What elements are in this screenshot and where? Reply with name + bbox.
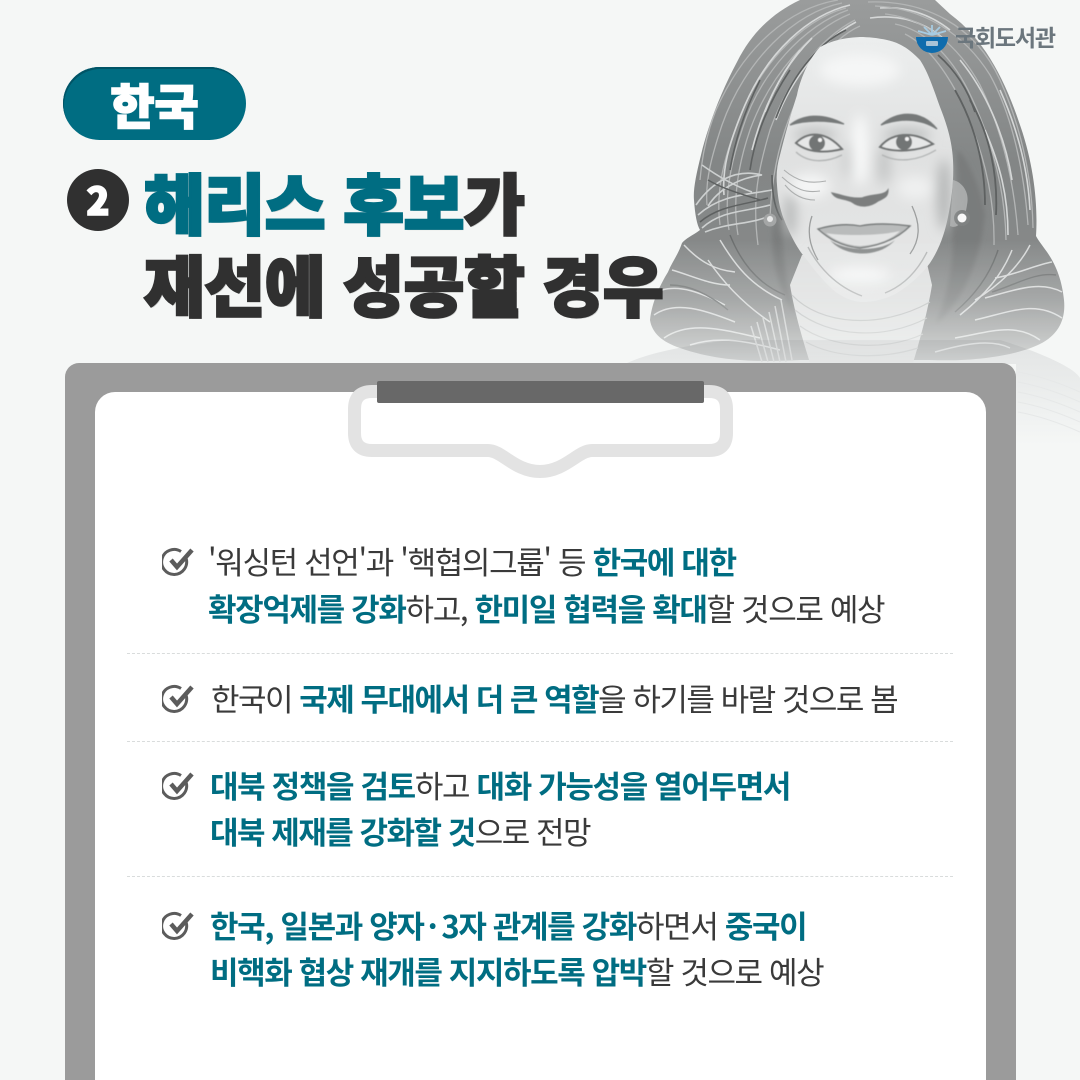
face shading [784, 54, 951, 284]
right strands [868, 2, 1033, 245]
left eye [796, 135, 842, 161]
item 3 [162, 762, 790, 853]
divider [127, 876, 953, 877]
logo emblem [916, 25, 948, 53]
pill label: 한국 [110, 68, 199, 138]
right eye [880, 134, 936, 160]
top and left strands [700, 0, 860, 245]
icon: check [162, 548, 194, 576]
clipboard clip [348, 381, 733, 478]
face [777, 37, 953, 302]
right eyebrow [881, 114, 937, 129]
text line 1: 대북 정책을 검토하고 대화 가능성을 열어두면서 [210, 762, 790, 807]
dark shadow beside face [773, 156, 984, 312]
neck [751, 255, 932, 363]
mouth [818, 224, 910, 254]
text: 한국이 국제 무대에서 더 큰 역할을 하기를 바랄 것으로 봄 [211, 675, 897, 720]
divider [127, 741, 953, 742]
logo: National Assembly Library [916, 19, 1056, 53]
icon: check [162, 912, 194, 940]
title line 1: 해리스 후보가 [144, 153, 524, 249]
cheek wrinkles [782, 170, 826, 200]
text line 2: 확장억제를 강화하고, 한미일 협력을 확대할 것으로 예상 [208, 585, 884, 630]
item 1 [162, 538, 884, 630]
item 4 [162, 902, 824, 993]
icon: check [162, 684, 194, 713]
icon: check [162, 772, 194, 800]
divider [127, 653, 953, 654]
text line 1: 한국, 일본과 양자·3자 관계를 강화하면서 중국이 [210, 902, 806, 947]
logo wordmark: 국회도서관 [955, 19, 1055, 53]
number badge [67, 169, 129, 231]
portrait illustration [628, 0, 1080, 432]
text line 2: 대북 제재를 강화할 것으로 전망 [210, 808, 590, 853]
shoulders [625, 340, 1080, 445]
lower curl strands [654, 240, 1062, 352]
ears and earrings [764, 180, 970, 227]
category pill: 한국 [63, 67, 246, 140]
title line 2: 재선에 성공할 경우 [144, 235, 663, 331]
hair mass [650, 0, 1064, 361]
item 2 [162, 675, 897, 720]
left eyebrow [790, 116, 844, 125]
panel: clipboard [65, 363, 1016, 1080]
nose [832, 190, 888, 206]
clip bar [377, 381, 704, 403]
clip outline [354, 392, 726, 472]
badge numeral: 2 [86, 171, 110, 226]
text line 2: 비핵화 협상 재개를 지지하도록 압박할 것으로 예상 [210, 948, 823, 993]
text line 1: '워싱턴 선언'과 '핵협의그룹' 등 한국에 대한 [208, 538, 736, 583]
left wave strands [696, 165, 772, 232]
clipboard sheet [95, 392, 986, 1080]
